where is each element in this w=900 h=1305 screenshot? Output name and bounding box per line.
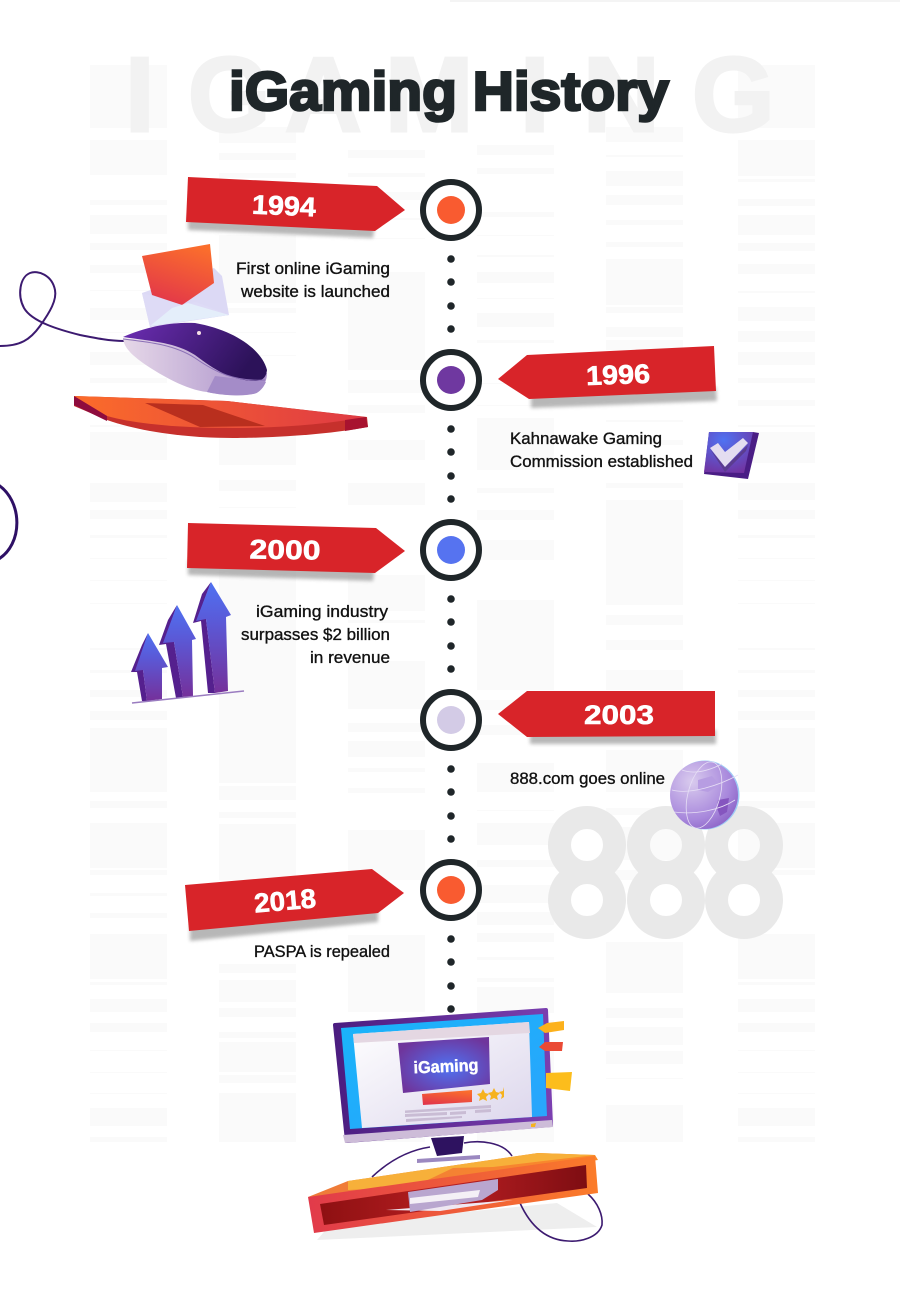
icon: checkbox xyxy=(704,432,759,479)
banner: 1996 xyxy=(498,346,717,408)
watermark: IGAMING: N xyxy=(583,36,660,154)
text: 1996 event xyxy=(510,429,693,471)
monitor: iGaming xyxy=(413,1056,479,1077)
text: 2018 event: PASPA is repealed xyxy=(254,942,390,961)
icon: mouse cable xyxy=(0,272,124,346)
text: 1996 event: Commission established xyxy=(510,452,693,471)
banner: 1994: 1994 xyxy=(251,190,317,222)
icon: envelope xyxy=(142,244,229,327)
icon: rising arrows xyxy=(131,582,244,703)
text: 1994 event: website is launched xyxy=(240,282,390,301)
node: 1994 xyxy=(423,182,479,238)
text: 1994 event: First online iGaming xyxy=(236,259,390,278)
banner: 2003: 2003 xyxy=(584,700,654,730)
banner: 2000 xyxy=(187,523,405,581)
decorative cable arc xyxy=(0,484,17,560)
banner: 2018 xyxy=(185,869,404,941)
tray xyxy=(308,1153,598,1233)
text: 2003 event: 888.com goes online xyxy=(510,769,665,788)
text: 1996 event: Kahnawake Gaming xyxy=(510,429,662,448)
banner: 1994 xyxy=(186,177,405,238)
monitor stand xyxy=(417,1136,480,1163)
watermark: IGAMING: I xyxy=(125,36,154,154)
watermark: IGAMING xyxy=(125,36,774,154)
icon: globe xyxy=(670,758,740,832)
watermark: 888 logo xyxy=(560,818,772,928)
watermark: IGAMING: I xyxy=(520,36,549,154)
node: 2003 xyxy=(423,692,479,748)
node: 2000 xyxy=(423,522,479,578)
banner: 2000: 2000 xyxy=(249,534,321,566)
node: 2018 xyxy=(423,862,479,918)
monitor xyxy=(335,1010,572,1143)
banner: 2018: 2018 xyxy=(253,883,317,919)
text: 2000 event: surpasses $2 billion xyxy=(241,625,390,644)
text: 2000 event: iGaming industry xyxy=(256,602,389,621)
text: 2000 event: in revenue xyxy=(310,648,390,667)
icon: orange board xyxy=(74,396,368,438)
watermark: IGAMING: G xyxy=(188,36,270,154)
background pattern xyxy=(90,0,900,1142)
illustration: computer on tray xyxy=(308,1010,602,1241)
title: iGaming History xyxy=(229,60,669,122)
text: 2000 event xyxy=(241,602,390,667)
icon: computer mouse xyxy=(123,323,267,395)
watermark: IGAMING: M xyxy=(385,36,473,154)
banner: 2003 xyxy=(498,691,716,744)
node: 1996 xyxy=(423,352,479,408)
timeline dots xyxy=(447,255,455,1013)
banner: 1996: 1996 xyxy=(586,359,651,391)
watermark: IGAMING: A xyxy=(285,36,362,154)
watermark: IGAMING: G xyxy=(692,36,774,154)
text: 1994 event xyxy=(236,259,390,301)
